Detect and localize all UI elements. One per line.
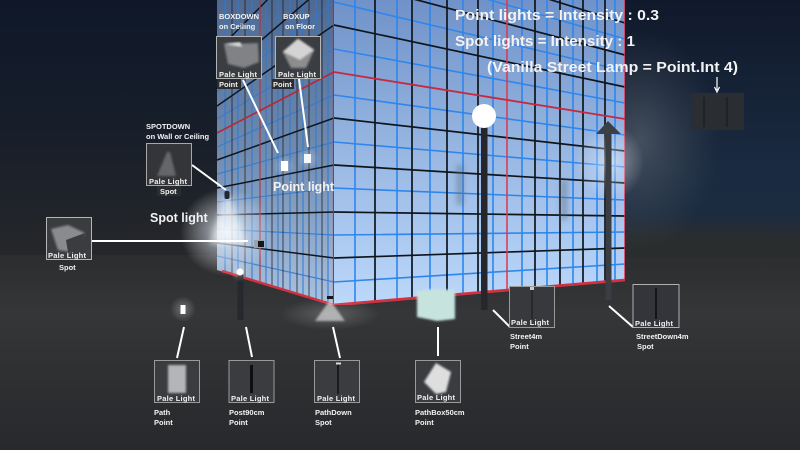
- panel: BOXUP: Point: [273, 80, 292, 89]
- panel: PathBox50cm: Point: [415, 418, 434, 427]
- panel: Path: Pale Light: [157, 394, 196, 403]
- heading: vanilla street lamp note: (Vanilla Street Lamp = Point.Int 4): [487, 59, 738, 76]
- panel: Post90cm: Pale Light: [231, 394, 270, 403]
- arrow to street lamp thumbnail: [714, 77, 720, 92]
- lamp: PathDown: [280, 296, 380, 330]
- panel: Post90cm: Point: [229, 418, 248, 427]
- small box spot fixture: [254, 240, 264, 248]
- callout lines: [91, 79, 633, 358]
- heading: point lights intensity: Point lights = Intensity : 0.3: [455, 7, 659, 24]
- night sky background: [0, 0, 800, 256]
- panel: BOXUP: [272, 12, 320, 89]
- panel: Path: [154, 360, 200, 427]
- panel: PathDown: Spot: [315, 418, 332, 427]
- glow: street down lamp: [576, 124, 644, 200]
- panel: Street4m: Point: [510, 342, 529, 351]
- panel: PathBox50cm: Pale Light: [417, 393, 456, 402]
- panel: PathBox50cm: [415, 360, 465, 427]
- panel: Post90cm: [229, 360, 274, 427]
- panel: Street4m: Street4m: [510, 332, 542, 341]
- panel: PathDown: PathDown: [315, 408, 352, 417]
- panel: StreetDown4m: Pale Light: [635, 319, 674, 328]
- panel: Path: Path: [154, 408, 171, 417]
- lamp: PathBox50cm: [417, 289, 455, 321]
- right wall grid: [334, 0, 625, 305]
- panel: left wall spot: Pale Light: [48, 251, 86, 260]
- panel: BOXDOWN: [216, 12, 262, 89]
- panel: PathBox50cm: PathBox50cm: [415, 408, 465, 417]
- right ground horizon: [625, 236, 800, 258]
- street lamp thumbnail: [691, 93, 744, 130]
- panel: Street4m: [510, 286, 554, 351]
- panel: SPOTDOWN: Spot: [160, 187, 177, 196]
- lamp: StreetDown4m: [596, 121, 621, 300]
- label: Point light: Point light: [273, 180, 335, 194]
- panel: Post90cm: Post90cm: [229, 408, 265, 417]
- panel: BOXDOWN: on Ceiling: [219, 22, 256, 31]
- left wall grid: [217, 0, 334, 305]
- panel: BOXUP: BOXUP: [283, 12, 310, 21]
- right sky background: [625, 0, 800, 240]
- panel: StreetDown4m: [633, 284, 689, 351]
- lamp: Path: [170, 296, 196, 322]
- panel: Street4m: Pale Light: [511, 318, 550, 327]
- panel: Path: Point: [154, 418, 173, 427]
- panel: SPOTDOWN: SPOTDOWN: [146, 122, 190, 131]
- panel: left wall spot: [46, 218, 92, 272]
- spot light on wall glow: [180, 188, 272, 276]
- panel: SPOTDOWN: on Wall or Ceiling: [146, 132, 209, 141]
- panel: BOXDOWN: Point: [219, 80, 238, 89]
- panel: BOXDOWN: Pale Light: [219, 70, 258, 79]
- ground: [0, 255, 800, 450]
- panel: left wall spot: Spot: [59, 263, 76, 272]
- panel: StreetDown4m: Spot: [637, 342, 654, 351]
- label: Spot light: Spot light: [150, 211, 208, 225]
- panel: SPOTDOWN: Pale Light: [149, 177, 188, 186]
- lamp: Street4m: [472, 104, 496, 310]
- lamp: Post90cm: [230, 262, 250, 320]
- distant lamp silhouettes: [457, 165, 567, 220]
- fog by street lamp: [560, 30, 720, 250]
- panel: BOXDOWN: BOXDOWN: [219, 12, 259, 21]
- panel: BOXUP: on Floor: [285, 22, 315, 31]
- panel: BOXUP: Pale Light: [278, 70, 316, 79]
- panel: StreetDown4m: StreetDown4m: [636, 332, 689, 341]
- heading: spot lights intensity: Spot lights = Intensity : 1: [455, 33, 635, 50]
- panel: PathDown: Pale Light: [317, 394, 356, 403]
- panel: PathDown: [314, 360, 360, 427]
- panel: SPOTDOWN: [146, 122, 209, 196]
- point light fixtures: [273, 147, 319, 177]
